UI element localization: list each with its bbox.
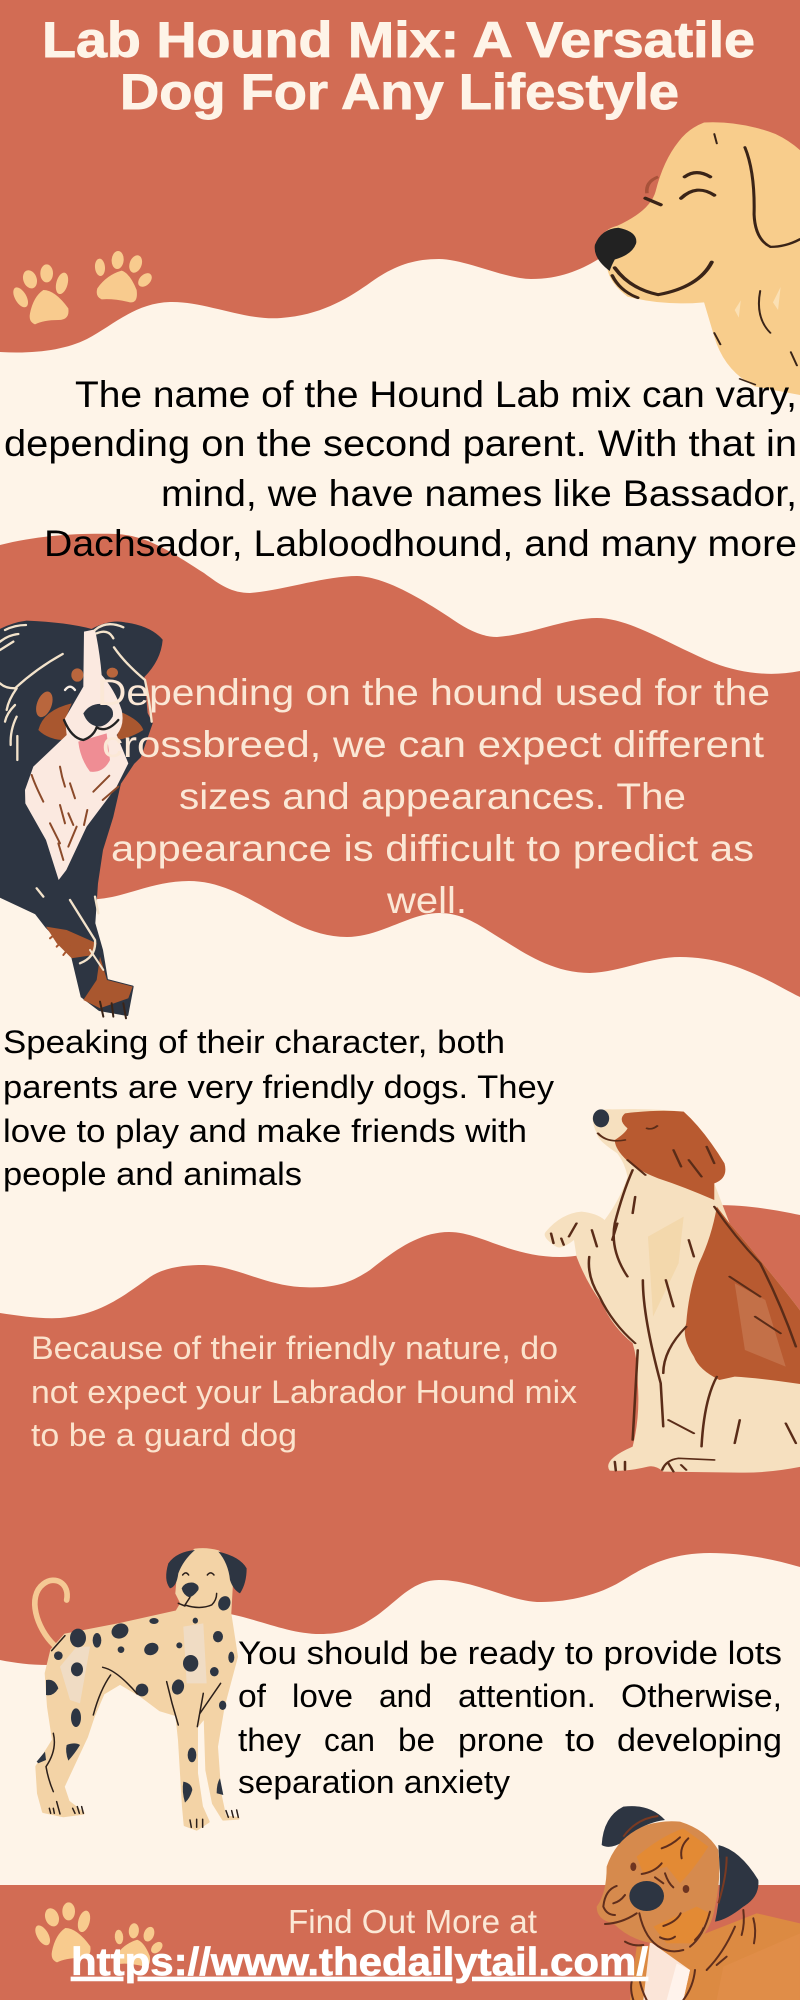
text block: separation anxiety: to	[565, 1722, 595, 1758]
text block: separation anxiety: separation anxiety	[238, 1764, 510, 1800]
text block: size and appearance: well.	[386, 880, 467, 921]
text block: separation anxiety: Otherwise,	[621, 1678, 782, 1714]
title: Dog For Any Lifestyle	[120, 64, 679, 120]
icon: dalmatian dog	[35, 1549, 247, 1829]
text block: friendly character: love to play and make friends with	[3, 1113, 527, 1149]
text block: friendly character: people and animals	[3, 1156, 302, 1192]
footer call to action: Find Out More at	[288, 1903, 537, 1940]
icon: paw prints footer	[32, 1902, 165, 1966]
text block: size and appearance	[97, 672, 770, 921]
panel: top terracotta wave	[0, 0, 800, 352]
text block: not a guard dog	[31, 1330, 577, 1453]
text block: not a guard dog: to be a guard dog	[31, 1417, 297, 1453]
icon: brown and cream sitting dog	[545, 1109, 800, 1473]
text block: friendly character: parents are very friendly dogs. They	[3, 1069, 554, 1105]
text block: separation anxiety	[238, 1635, 782, 1800]
text block: separation anxiety: You should be ready to provide lots	[238, 1635, 782, 1671]
text block: separation anxiety: developing	[617, 1722, 782, 1758]
icon: boxer dog	[597, 1806, 800, 2000]
text block: size and appearance: crossbreed, we can expect different	[102, 724, 765, 765]
text block: size and appearance: Depending on the hound used for the	[97, 672, 770, 713]
text block: separation anxiety: prone	[458, 1722, 544, 1758]
text block: separation anxiety: can	[324, 1722, 375, 1758]
title: Lab Hound Mix: A Versatile	[42, 12, 755, 68]
panel: second terracotta wave	[0, 534, 800, 997]
text block: separation anxiety: of	[238, 1678, 266, 1714]
footer link: https://www.thedailytail.com/	[71, 1941, 648, 1984]
panel: third terracotta wave	[0, 1205, 800, 1665]
text block: not a guard dog: Because of their friendly nature, do	[31, 1330, 558, 1366]
text block: size and appearance: sizes and appearances. The	[179, 776, 686, 817]
text block: separation anxiety: love	[292, 1678, 353, 1714]
text block: names of the mix: Dachsador, Labloodhound, and many more	[44, 523, 797, 564]
text block: separation anxiety: attention.	[458, 1678, 596, 1714]
text block: not a guard dog: not expect your Labrador Hound mix	[31, 1374, 577, 1410]
text block: names of the mix: The name of the Hound Lab mix can vary,	[75, 374, 797, 415]
text block: names of the mix	[4, 374, 797, 564]
text block: friendly character: Speaking of their character, both	[3, 1024, 505, 1060]
text block: names of the mix: mind, we have names like Bassador,	[161, 473, 797, 514]
text block: friendly character	[3, 1024, 554, 1192]
text block: names of the mix: depending on the second parent. With that in	[4, 423, 797, 464]
icon: golden labrador dog	[595, 122, 800, 398]
text block: size and appearance: appearance is difficult to predict as	[111, 828, 754, 869]
icon: paw prints top	[10, 251, 154, 324]
text block: separation anxiety: and	[379, 1678, 432, 1714]
panel: footer band	[0, 1885, 800, 2000]
icon: bernese mountain dog	[0, 622, 162, 1018]
text block: separation anxiety: be	[398, 1722, 435, 1758]
text block: separation anxiety: they	[238, 1722, 301, 1758]
title	[42, 12, 755, 120]
